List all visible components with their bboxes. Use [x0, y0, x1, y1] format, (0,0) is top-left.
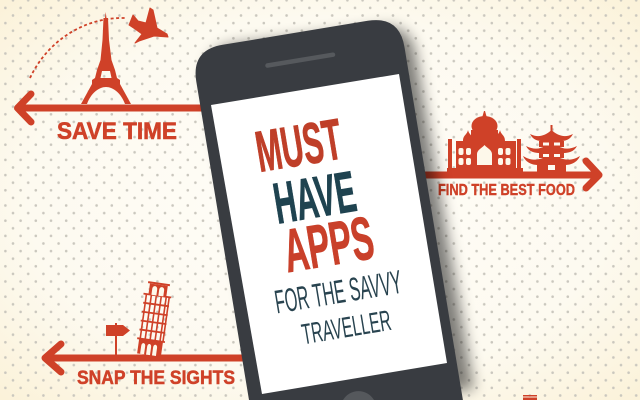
arrow: save time — [18, 94, 205, 122]
icon: pagoda — [523, 125, 580, 172]
phone shadow — [207, 27, 474, 390]
icon: leaning tower of pisa — [135, 281, 173, 357]
home button — [343, 391, 374, 400]
flight path — [30, 18, 125, 78]
label: snap the sights: SNAP THE SIGHTS — [77, 367, 235, 389]
label: find the best food: FIND THE BEST FOOD — [438, 182, 575, 199]
phone — [196, 20, 463, 400]
subtitle: for the savvy: FOR THE SAVVY — [272, 263, 404, 320]
speaker — [268, 55, 333, 66]
phone body — [196, 20, 463, 400]
heading: apps: APPS — [279, 203, 379, 285]
heading: must: MUST — [251, 107, 347, 185]
icon: cropped bottom marker — [523, 395, 537, 400]
icon: plane — [129, 8, 168, 43]
icon: taj mahal — [447, 111, 523, 173]
screen — [211, 74, 447, 394]
icon: eiffel tower — [81, 12, 131, 104]
label: save time: SAVE TIME — [57, 118, 177, 145]
icon: signpost — [106, 323, 130, 356]
subtitle: traveller: TRAVELLER — [300, 305, 394, 351]
heading: have: HAVE — [269, 159, 361, 237]
arrow: find the best food — [420, 161, 599, 188]
arrow: snap the sights — [45, 344, 248, 372]
